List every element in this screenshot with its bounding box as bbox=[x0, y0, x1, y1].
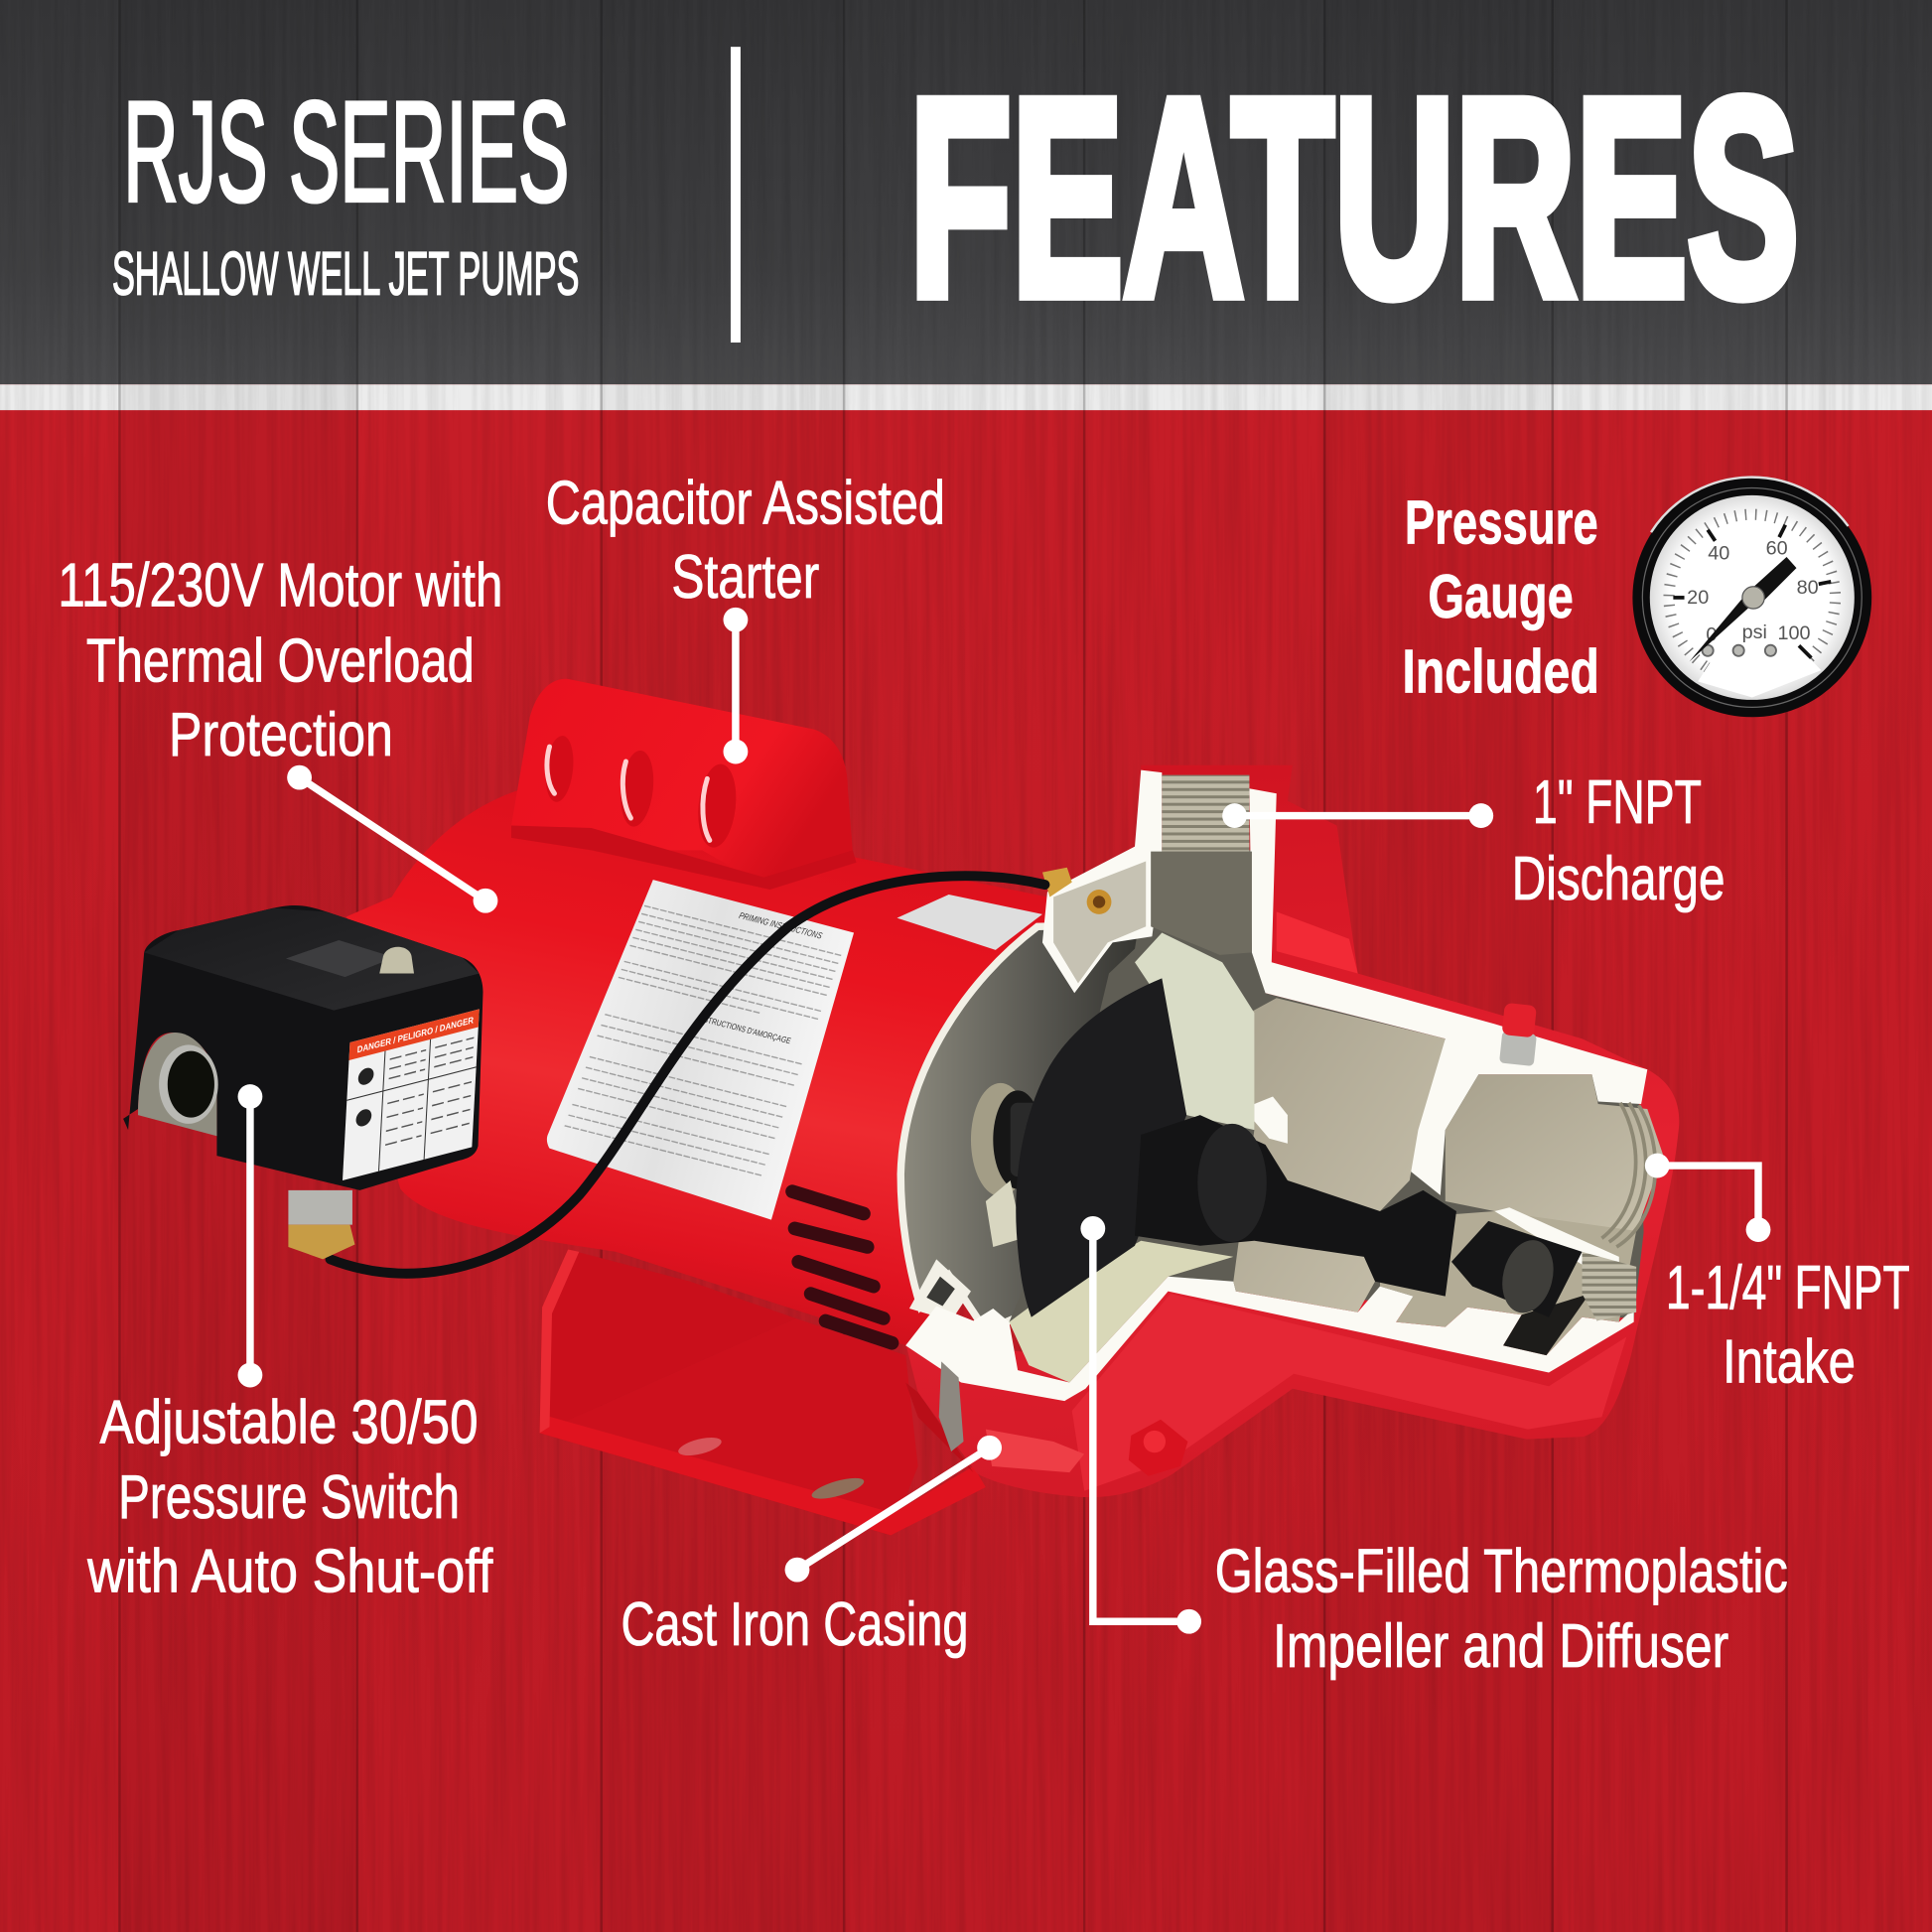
label: pressure gauge included: Included bbox=[1402, 637, 1599, 706]
label: motor: 115/230V Motor with bbox=[58, 552, 502, 621]
pressure gauge: 40 bbox=[1708, 542, 1729, 564]
rating plate bbox=[897, 895, 1042, 950]
label: pressure switch bbox=[86, 1388, 493, 1605]
label: cast iron casing: Cast Iron Casing bbox=[621, 1590, 968, 1659]
danger label: DANGER / PELIGRO / DANGER bbox=[357, 1015, 475, 1054]
label: discharge: Discharge bbox=[1512, 845, 1725, 913]
casing cut-away walls bbox=[905, 770, 1647, 1401]
label: intake bbox=[1666, 1254, 1910, 1396]
label: pressure switch: Pressure Switch bbox=[118, 1463, 460, 1532]
callout line: pressure switch bbox=[238, 1084, 262, 1387]
capacitor cover bbox=[511, 679, 857, 890]
label: motor bbox=[58, 552, 502, 769]
label: motor: Protection bbox=[169, 701, 393, 769]
label: capacitor assisted starter bbox=[546, 469, 945, 612]
label: intake: Intake bbox=[1723, 1327, 1856, 1396]
motor end opening bbox=[900, 924, 1146, 1330]
danger label bbox=[343, 1009, 480, 1180]
pressure switch bbox=[123, 905, 483, 1190]
pump illustration bbox=[123, 679, 1679, 1535]
callout line: motor bbox=[287, 765, 497, 913]
label: pressure gauge included: Pressure bbox=[1405, 488, 1598, 557]
header divider bbox=[731, 47, 741, 343]
header: series title: RJS SERIES bbox=[123, 71, 569, 231]
callout line: intake bbox=[1645, 1154, 1770, 1242]
diffuser housing arm bbox=[1042, 862, 1146, 983]
pressure gauge: 100 bbox=[1777, 622, 1811, 644]
instruction label: INSTRUCTIONS D'AMORÇAGE bbox=[696, 1013, 792, 1045]
instruction label: PRIMING INSTRUCTIONS bbox=[738, 910, 824, 941]
casing interior backing bbox=[1009, 850, 1644, 1382]
pump casing bbox=[905, 765, 1679, 1497]
label: motor: Thermal Overload bbox=[86, 626, 475, 695]
brass fitting bbox=[288, 1190, 354, 1259]
pressure cable bbox=[331, 876, 1044, 1274]
motor body bbox=[346, 788, 1072, 1355]
pressure gauge bbox=[1632, 478, 1871, 717]
label: capacitor assisted starter: Capacitor Assisted bbox=[546, 469, 945, 537]
cooling vents bbox=[792, 1191, 893, 1343]
pressure gauge: 0 bbox=[1706, 623, 1717, 645]
label: capacitor assisted starter: Starter bbox=[671, 543, 819, 612]
label: discharge bbox=[1512, 768, 1725, 913]
priming plug bbox=[1499, 1003, 1537, 1066]
callout line: impeller bbox=[1080, 1216, 1201, 1634]
pressure gauge: 80 bbox=[1797, 577, 1819, 599]
casing bolt and casting mark bbox=[939, 1361, 1187, 1476]
label: pressure gauge included: Gauge bbox=[1428, 563, 1574, 631]
instruction label bbox=[547, 880, 854, 1220]
discharge port threads bbox=[1151, 775, 1252, 955]
header: series title: SHALLOW WELL JET PUMPS bbox=[112, 240, 579, 308]
callout line: capacitor bbox=[724, 608, 748, 763]
casting chamber bbox=[1233, 998, 1446, 1312]
label: impeller: Impeller and Diffuser bbox=[1273, 1612, 1728, 1681]
callout line: cast iron bbox=[785, 1436, 1002, 1583]
label: impeller: Glass-Filled Thermoplastic bbox=[1215, 1537, 1788, 1605]
pressure gauge: 20 bbox=[1687, 587, 1709, 609]
intake chamber bbox=[1380, 1074, 1663, 1355]
label: pressure switch: Adjustable 30/50 bbox=[100, 1388, 479, 1456]
label: discharge: 1" FNPT bbox=[1533, 768, 1702, 837]
label: pressure switch: with Auto Shut-off bbox=[86, 1537, 493, 1605]
callout line: discharge bbox=[1222, 803, 1493, 828]
diffuser bbox=[1009, 932, 1288, 1382]
header: series title bbox=[112, 71, 579, 308]
black impeller and venturi bbox=[1016, 978, 1583, 1318]
pressure gauge: psi bbox=[1742, 621, 1767, 643]
label: pressure gauge included bbox=[1402, 488, 1599, 706]
pressure gauge: 60 bbox=[1766, 537, 1788, 559]
mounting bracket bbox=[540, 1249, 986, 1535]
label: impeller bbox=[1215, 1537, 1788, 1681]
